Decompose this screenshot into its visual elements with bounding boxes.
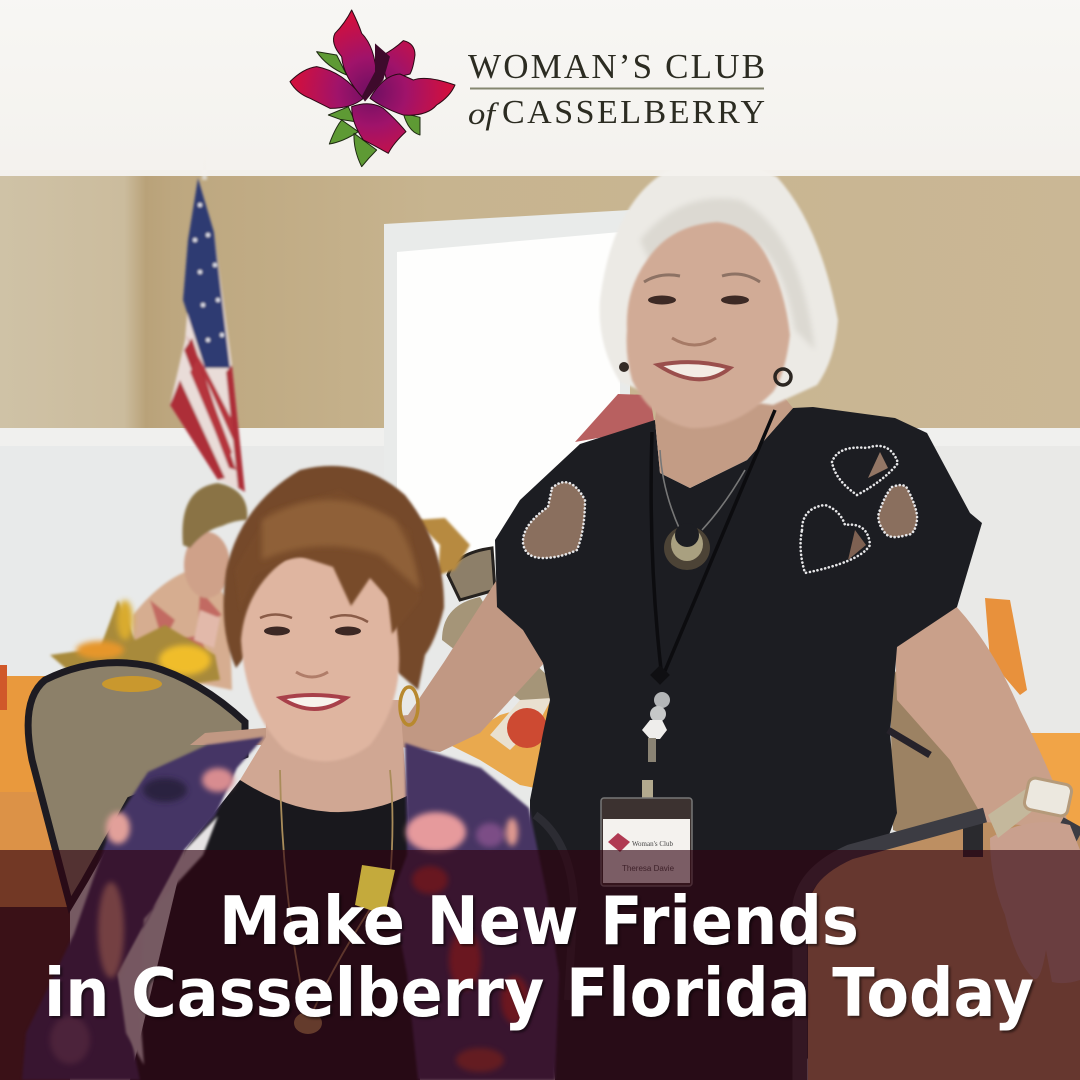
top logo band xyxy=(0,0,1080,176)
gold necklace xyxy=(280,770,392,1022)
her right arm and hand xyxy=(190,578,545,752)
hair shadow strands xyxy=(640,198,815,350)
left chair xyxy=(28,663,245,905)
bottom dark overlay xyxy=(0,850,1080,1080)
small chair arc behind seated woman xyxy=(535,815,574,1000)
cardigan floral accents xyxy=(50,768,529,1072)
logo: club name: of xyxy=(468,96,500,131)
pendant xyxy=(294,1012,322,1034)
chairs stacked by the window xyxy=(415,518,552,700)
smile xyxy=(658,362,730,379)
stamen xyxy=(362,43,390,102)
background table with orange cloth, right xyxy=(890,598,1080,860)
eyebrows xyxy=(644,274,760,282)
background table with orange cloth, left xyxy=(0,665,150,1080)
flower centrepiece xyxy=(50,600,220,690)
petals xyxy=(290,10,455,153)
neck xyxy=(655,380,793,488)
smile xyxy=(281,695,346,709)
tabletop pumpkin and decor xyxy=(450,698,552,790)
neck and chest xyxy=(240,700,407,812)
nose xyxy=(672,338,716,345)
earrings xyxy=(619,362,791,385)
hair highlight xyxy=(262,500,420,590)
necklace with crescent pendant xyxy=(660,450,745,570)
logo: club name xyxy=(468,47,765,131)
headline xyxy=(44,882,1034,1032)
eyes xyxy=(648,296,749,304)
standing woman xyxy=(190,162,1070,1080)
eyebrows xyxy=(260,614,368,622)
black top xyxy=(130,780,420,1080)
background guest with floral top xyxy=(133,483,247,690)
hand resting on chair xyxy=(990,822,1080,983)
American flag xyxy=(170,148,245,492)
face xyxy=(241,556,399,761)
headline: in Casselberry Florida Today xyxy=(44,954,1034,1032)
background person in striped shirt xyxy=(575,394,655,442)
name badge: Woman's Club xyxy=(632,840,673,848)
leaves xyxy=(317,52,420,167)
face xyxy=(627,222,790,428)
cardigan right panel xyxy=(392,743,559,1080)
her left arm xyxy=(895,600,1070,830)
cardigan inner lining xyxy=(118,816,218,1065)
eyes xyxy=(264,626,361,636)
right chair with brown fabric xyxy=(800,730,1080,1080)
logo: club name: WOMAN’S CLUB xyxy=(468,47,765,86)
yellow visitor badge xyxy=(355,865,395,915)
window xyxy=(384,210,630,560)
cardigan left panel xyxy=(22,737,264,1080)
rhinestone heart cutouts xyxy=(523,446,917,573)
hair xyxy=(600,162,838,405)
name badge xyxy=(601,798,692,886)
lanyard with beads xyxy=(642,410,775,810)
hoop earring xyxy=(400,687,418,725)
hair bangs xyxy=(235,490,420,634)
seated woman xyxy=(22,466,559,1080)
logo: club name: CASSELBERRY xyxy=(502,94,765,131)
name badge: Theresa Davie xyxy=(622,864,675,873)
logo: hibiscus flower xyxy=(290,10,455,167)
hair xyxy=(224,466,444,690)
black shirt xyxy=(495,407,982,1080)
headline: Make New Friends xyxy=(219,882,859,960)
wristwatch xyxy=(988,777,1073,838)
nose xyxy=(296,672,328,677)
